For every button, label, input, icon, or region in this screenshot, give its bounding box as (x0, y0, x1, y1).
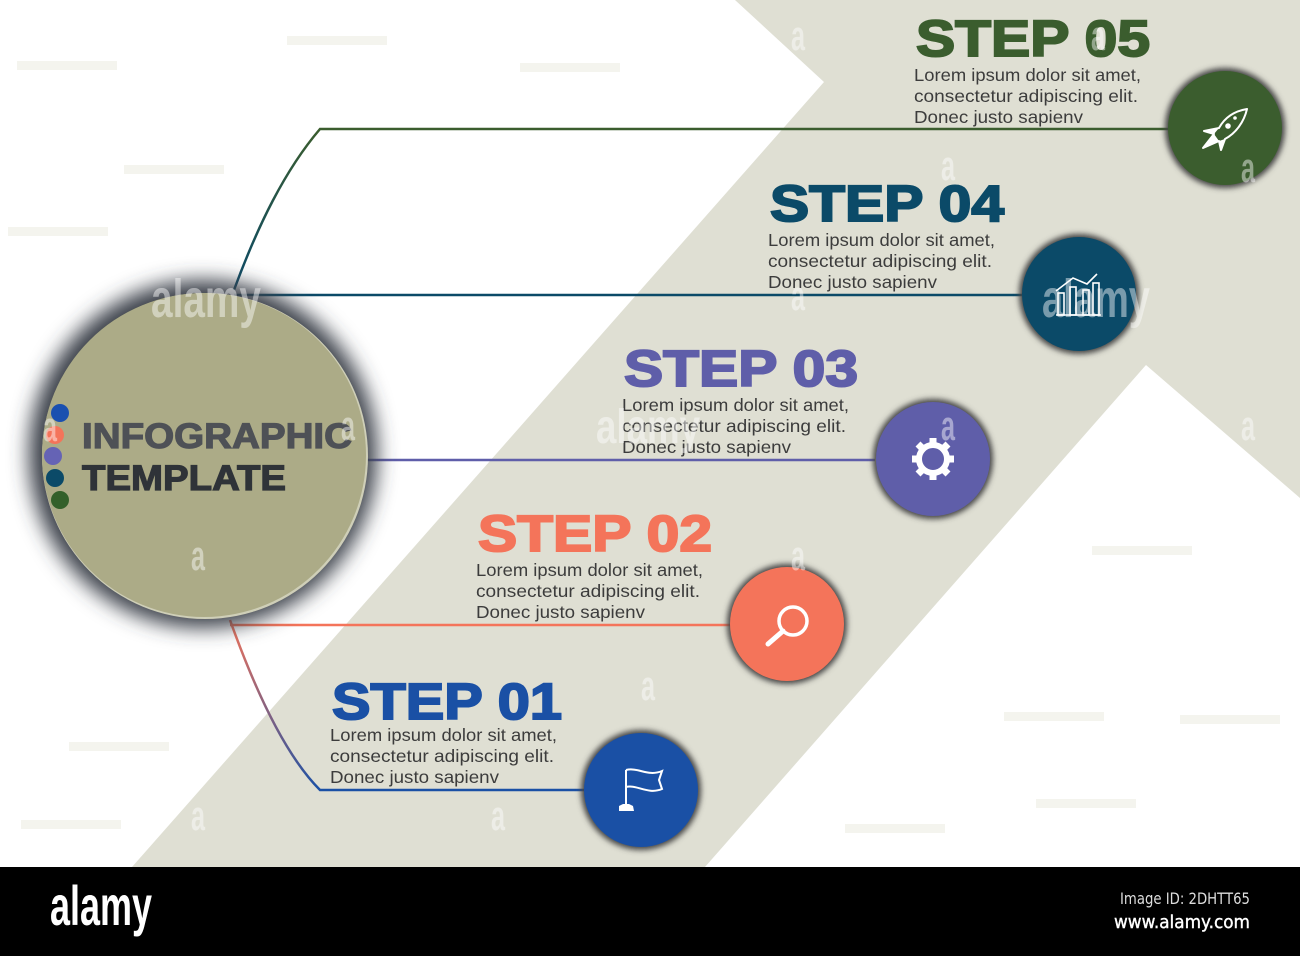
step 04 (768, 175, 1139, 354)
body text: Lorem ipsum dolor sit amet, (768, 230, 995, 250)
watermark: a (641, 662, 655, 709)
step 01 (330, 673, 701, 850)
website: www.alamy.com (1114, 912, 1250, 933)
body text: consectetur adipiscing elit. (768, 251, 992, 271)
body text (476, 560, 703, 622)
body text: consectetur adipiscing elit. (622, 416, 846, 436)
body text: consectetur adipiscing elit. (476, 581, 700, 601)
body text: Donec justo sapienv (768, 272, 937, 292)
heading: STEP 02 (478, 505, 712, 562)
watermark: a (1241, 144, 1255, 191)
icon: magnifier (727, 564, 847, 684)
step 03 (622, 340, 993, 519)
watermark: a (791, 272, 805, 319)
body text (330, 725, 557, 787)
body text (622, 395, 849, 457)
watermark: a (43, 403, 57, 450)
connector: step 05 (234, 129, 1168, 290)
icon: flag (581, 730, 701, 850)
connector: step 04 (234, 294, 1022, 296)
icon: chart (1019, 234, 1139, 354)
body text (914, 65, 1141, 127)
watermark: alamy (151, 269, 261, 329)
heading: STEP 04 (770, 175, 1005, 232)
panel: central circle (29, 280, 377, 628)
watermark: alamy (1042, 269, 1150, 329)
watermark: a (791, 12, 805, 59)
title: template: TEMPLATE (82, 459, 286, 498)
icon: rocket (1165, 68, 1285, 188)
body text: Donec justo sapienv (330, 767, 499, 787)
watermark: alamy (596, 401, 700, 454)
image id: Image ID: 2DHTT65 (1120, 889, 1250, 908)
watermark: a (941, 402, 955, 449)
footer logo: alamy (50, 874, 152, 937)
body text: Lorem ipsum dolor sit amet, (476, 560, 703, 580)
legend dots (44, 404, 69, 509)
icon: gear (873, 399, 993, 519)
step 02 (476, 505, 847, 684)
body text: consectetur adipiscing elit. (330, 746, 554, 766)
body text (768, 230, 995, 292)
body text: Donec justo sapienv (914, 107, 1083, 127)
body text: Lorem ipsum dolor sit amet, (914, 65, 1141, 85)
watermark: a (941, 142, 955, 189)
watermark: a (791, 532, 805, 579)
watermark: a (1091, 12, 1105, 59)
body text: Donec justo sapienv (622, 437, 791, 457)
connector: step 03 (365, 459, 875, 461)
watermark: a (341, 402, 355, 449)
body text: Lorem ipsum dolor sit amet, (622, 395, 849, 415)
heading: STEP 01 (332, 673, 562, 730)
connector: step 02 (230, 624, 730, 626)
watermark: a (191, 532, 205, 579)
body text: Lorem ipsum dolor sit amet, (330, 725, 557, 745)
body text: Donec justo sapienv (476, 602, 645, 622)
watermark: a (1241, 402, 1255, 449)
body text: consectetur adipiscing elit. (914, 86, 1138, 106)
title: infographic: INFOGRAPHIC (82, 417, 352, 456)
step 05 (914, 10, 1285, 188)
watermark: a (191, 792, 205, 839)
heading: STEP 03 (624, 340, 858, 397)
watermark: a (491, 792, 505, 839)
connector: step 01 (230, 620, 584, 790)
footer bar (0, 867, 1300, 956)
heading: STEP 05 (916, 10, 1150, 67)
